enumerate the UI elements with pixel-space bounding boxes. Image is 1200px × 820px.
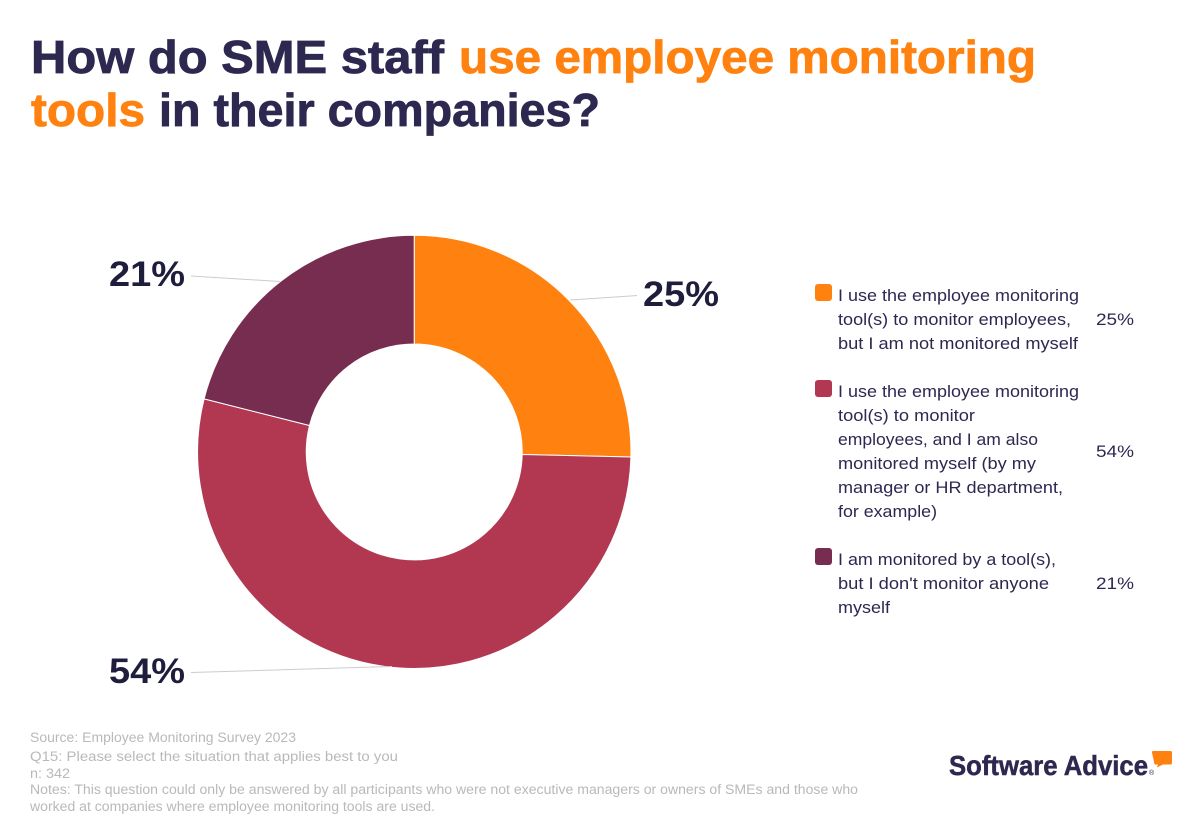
logo: Software Advice: ® bbox=[1149, 769, 1155, 777]
legend item: 21% bbox=[815, 548, 1134, 617]
legend item: 54%: for example) bbox=[838, 502, 937, 521]
footer notes: Source: Employee Monitoring Survey 2023 bbox=[30, 730, 296, 745]
data label: 54%: 54% bbox=[109, 652, 185, 691]
leader line: 54% bbox=[191, 666, 392, 672]
title bbox=[31, 31, 1036, 136]
legend item: 21%: I am monitored by a tool(s), bbox=[838, 550, 1056, 569]
legend item: 54%: I use the employee monitoring bbox=[838, 382, 1079, 401]
footer notes bbox=[29, 730, 858, 814]
segment: 25% not monitored bbox=[414, 235, 631, 457]
legend item: 25%: but I am not monitored myself bbox=[838, 334, 1078, 353]
legend item: 25%: 25% bbox=[1096, 310, 1134, 329]
data label: 25%: 25% bbox=[643, 275, 719, 314]
legend item: 54%: monitored myself (by my bbox=[838, 454, 1037, 473]
legend item: 54%: 54% bbox=[1096, 442, 1134, 461]
footer notes: Q15: Please select the situation that applies best to you bbox=[30, 749, 398, 764]
footer notes: worked at companies where employee monitoring tools are used. bbox=[29, 799, 435, 814]
legend item: 25%: I use the employee monitoring bbox=[838, 286, 1079, 305]
legend item: 54%: tool(s) to monitor bbox=[838, 406, 975, 425]
legend item: 54%: employees, and I am also bbox=[838, 430, 1038, 449]
title: in their companies? bbox=[159, 84, 600, 136]
segment: 54% also monitored bbox=[198, 399, 631, 668]
legend item: 21%: 21% bbox=[1096, 574, 1134, 593]
logo: Software Advice: Software Advice bbox=[949, 750, 1148, 781]
footer notes: n: 342 bbox=[30, 766, 70, 781]
legend item: 54% bbox=[815, 380, 1134, 521]
legend item: 25%: tool(s) to monitor employees, bbox=[838, 310, 1071, 329]
legend item: 21%: but I don't monitor anyone bbox=[838, 574, 1049, 593]
legend bbox=[815, 284, 1134, 617]
title: use employee monitoring bbox=[459, 31, 1036, 83]
data label: 21%: 21% bbox=[109, 255, 185, 294]
title: tools bbox=[31, 84, 145, 136]
legend item: 25% bbox=[815, 284, 1134, 353]
title: How do SME staff bbox=[31, 31, 445, 83]
leader line: 25% bbox=[570, 296, 637, 300]
footer notes: Notes: This question could only be answered by all participants who were not executive managers or owners of SMEs and those who bbox=[30, 782, 858, 797]
segment: 21% monitored only bbox=[204, 235, 414, 426]
icon: speech bubble bbox=[1152, 751, 1172, 768]
legend item: 21%: myself bbox=[838, 598, 890, 617]
leader line: 21% bbox=[191, 276, 280, 282]
legend item: 54%: manager or HR department, bbox=[838, 478, 1063, 497]
donut chart bbox=[198, 235, 631, 668]
